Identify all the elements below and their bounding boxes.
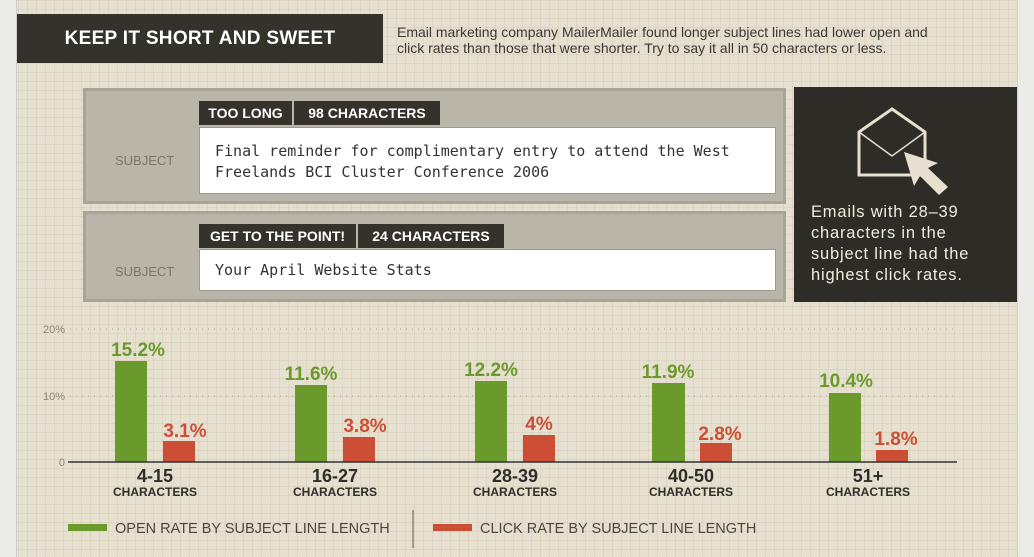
tab: 98 characters <box>294 101 440 125</box>
tab: 24 characters: 24 CHARACTERS <box>372 228 490 244</box>
group: 28-39: 4% <box>525 414 553 435</box>
legend <box>68 510 756 548</box>
group: 4-15 <box>111 340 207 499</box>
bar chart <box>43 324 957 548</box>
y axis labels <box>43 324 65 469</box>
group: 40-50: 40-50 <box>668 466 714 486</box>
group: 4-15: CHARACTERS <box>113 485 197 499</box>
legend: CLICK RATE BY SUBJECT LINE LENGTH <box>480 521 756 537</box>
group: 51+ <box>819 371 918 499</box>
group: 40-50: CHARACTERS <box>649 485 733 499</box>
group: 51+: 10.4% <box>819 371 873 392</box>
subject box long <box>199 127 776 194</box>
icon: envelope with cursor <box>858 107 948 195</box>
callout panel: highest click rates <box>794 87 1017 302</box>
group: 16-27: 16-27 <box>312 466 358 486</box>
tab: get to the point: GET TO THE POINT! <box>210 228 345 244</box>
group: 16-27: 11.6% <box>285 364 338 385</box>
y axis labels: 0 <box>59 457 65 469</box>
group: 51+: 1.8% <box>874 429 918 450</box>
y axis labels: 10% <box>43 391 65 403</box>
title: KEEP IT SHORT AND SWEET <box>65 28 335 49</box>
tab: 24 characters <box>358 224 504 248</box>
group: 28-39: 28-39 <box>492 466 538 486</box>
group: 40-50: 11.9% <box>642 362 695 383</box>
callout text: Emails with 28–39 characters in the subject line had the highest click rates. <box>811 203 969 284</box>
panel: get to the point example <box>83 211 786 302</box>
group: 28-39: 12.2% <box>464 360 518 381</box>
description text: Email marketing company MailerMailer found longer subject lines had lower open and click rates than those that were shorter. Try to say it all in 50 characters or less. <box>397 24 928 56</box>
panel: too long example <box>83 88 786 204</box>
group: 28-39 <box>464 360 557 499</box>
legend: OPEN RATE BY SUBJECT LINE LENGTH <box>115 521 390 537</box>
group: 16-27: 3.8% <box>343 416 387 437</box>
group: 51+: 51+ <box>853 466 883 486</box>
group: 40-50 <box>642 362 742 499</box>
group: 16-27 <box>285 364 387 499</box>
subject label: SUBJECT <box>115 153 174 168</box>
y axis labels: 20% <box>43 324 65 336</box>
tab: 98 characters: 98 CHARACTERS <box>308 105 426 121</box>
group: 51+: CHARACTERS <box>826 485 910 499</box>
subject box long: Final reminder for complimentary entry to attend the West Freelands BCI Cluster Conference 2006 <box>215 142 730 181</box>
tab: get to the point <box>199 224 356 248</box>
title <box>17 14 383 63</box>
subject box short <box>199 249 776 291</box>
tab: too long <box>199 101 292 125</box>
subject label: SUBJECT <box>115 264 174 279</box>
group: 40-50: 2.8% <box>698 424 742 445</box>
subject box short: Your April Website Stats <box>215 261 432 279</box>
tab: too long: TOO LONG <box>208 105 283 121</box>
group: 4-15: 3.1% <box>163 421 207 442</box>
group: 4-15: 15.2% <box>111 340 165 361</box>
group: 16-27: CHARACTERS <box>293 485 377 499</box>
group: 4-15: 4-15 <box>137 466 173 486</box>
group: 28-39: CHARACTERS <box>473 485 557 499</box>
